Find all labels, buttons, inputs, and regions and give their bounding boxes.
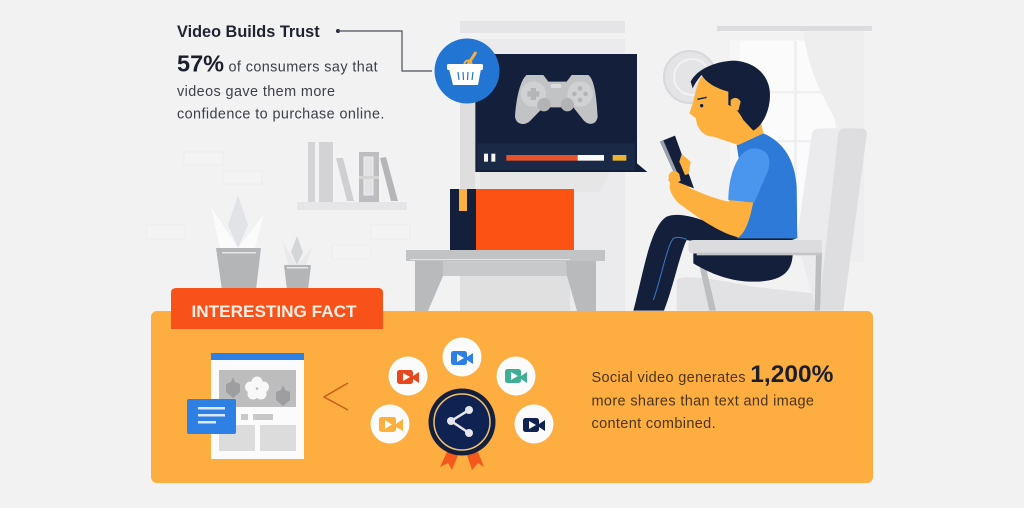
- near leg and torso base: [633, 215, 797, 311]
- neck and head: [689, 77, 763, 145]
- plant: small: [282, 236, 312, 290]
- game controller: [515, 75, 598, 124]
- panel: interesting fact: [151, 288, 873, 483]
- text: 57 percent statistic: 57% of consumers say that: [177, 50, 378, 76]
- icon: shopping basket: [434, 38, 500, 104]
- chair seat: [688, 240, 822, 255]
- icon: red video camera: [388, 356, 428, 396]
- plant: large: [211, 195, 264, 290]
- icon: blue video camera: [442, 338, 482, 376]
- text: 57 percent statistic: confidence to purchase online.: [177, 106, 385, 122]
- eye and brow: [700, 104, 703, 107]
- icon: share badge: [428, 388, 496, 470]
- arm: [670, 180, 753, 237]
- bookshelf: [297, 142, 407, 210]
- wall unit: [460, 21, 625, 311]
- phone: [660, 136, 694, 188]
- connector line: [336, 29, 432, 71]
- person: [633, 61, 797, 311]
- hair: [691, 61, 770, 131]
- icon: orange video camera: [370, 404, 410, 444]
- icon: web page: [187, 353, 304, 459]
- coffee table: [406, 250, 605, 311]
- icon: navy video camera: [514, 404, 554, 444]
- fingers: [679, 154, 691, 175]
- background wall bricks: [146, 152, 410, 259]
- video player: [475, 54, 647, 172]
- heading: video builds trust: Video Builds Trust: [177, 23, 320, 41]
- book box: [450, 189, 574, 250]
- window with curtain: [717, 26, 872, 262]
- torso: [737, 133, 797, 238]
- text: social video statistic: more shares than text and image: [592, 394, 814, 410]
- text: social video statistic: Social video generates 1,200%: [592, 361, 833, 388]
- far leg: [693, 253, 793, 282]
- hand under phone: [668, 172, 690, 193]
- text: 57 percent statistic: videos gave them more: [177, 84, 335, 100]
- armchair: [677, 128, 867, 311]
- text: social video statistic: content combined.: [592, 416, 716, 432]
- less-than symbol: [324, 383, 348, 410]
- sleeve: [728, 148, 769, 203]
- tab: interesting fact: INTERESTING FACT: [192, 302, 357, 321]
- wall clock: [664, 51, 716, 103]
- icon: green video camera: [496, 356, 536, 396]
- tab: interesting fact: [171, 288, 383, 329]
